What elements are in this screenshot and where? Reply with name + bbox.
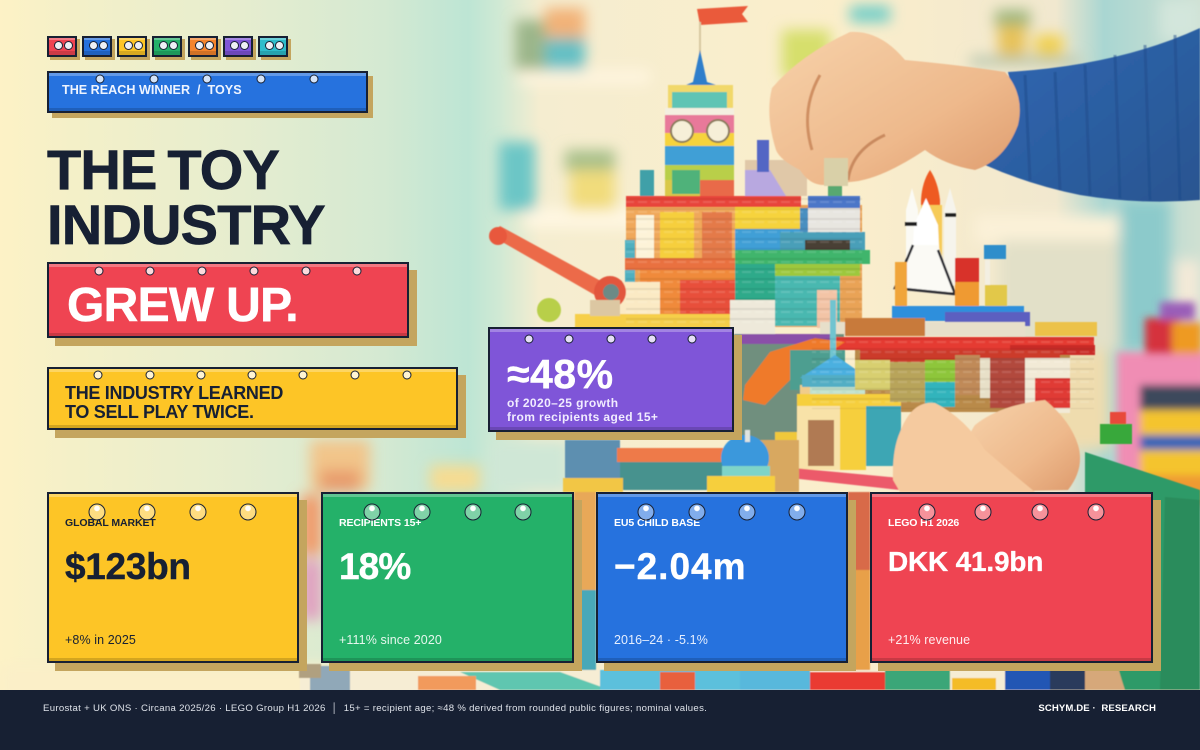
title: INDUSTRY (47, 193, 325, 256)
callout: 48 percent of growth: ≈48% (507, 351, 614, 397)
icon: blue brick (82, 36, 112, 57)
subhead banner: THE INDUSTRY LEARNED (65, 383, 283, 403)
colored brick row icons (47, 36, 291, 60)
stat card: EU5 child base: EU5 CHILD BASE (614, 517, 700, 529)
blurred pink toy shelf (1117, 302, 1200, 507)
footer brand: SCHYM.DE · RESEARCH (1038, 703, 1156, 714)
adult hand and blue sleeve (769, 28, 1200, 202)
callout: 48 percent of growth (488, 327, 734, 432)
stat card: EU5 child base: 2016–24 · -5.1% (614, 633, 708, 647)
toy crane (489, 226, 626, 322)
stat card: global market: $123bn (65, 546, 191, 587)
stat card: recipients 15+: +111% since 2020 (339, 633, 442, 647)
icon: teal brick (258, 36, 288, 57)
icon: purple brick (223, 36, 253, 57)
kicker label: THE REACH WINNER / TOYS (62, 83, 242, 97)
icon: red brick (47, 36, 77, 57)
brick platforms (563, 300, 1132, 675)
icon: yellow brick (117, 36, 147, 57)
title: THE TOY (47, 138, 279, 201)
stat card: global market: GLOBAL MARKET (65, 517, 156, 529)
stat card: LEGO H1 2026 (870, 492, 1153, 663)
headline banner: grew up (47, 262, 409, 338)
subhead banner (47, 367, 458, 430)
stat card: global market (47, 492, 299, 663)
title (47, 138, 326, 256)
icon: green brick (152, 36, 182, 57)
bottom strip of bricks (299, 664, 1200, 692)
subhead banner: TO SELL PLAY TWICE. (65, 402, 254, 422)
callout: 48 percent of growth: from recipients aged 15+ (507, 410, 658, 424)
footer source note: Eurostat + UK ONS · Circana 2025/26 · LEGO Group H1 2026 │ 15+ = recipient age; ≈48 % derived from rounded public figures; nominal values. (43, 703, 707, 714)
callout: 48 percent of growth: of 2020–25 growth (507, 396, 619, 410)
stat card: LEGO H1 2026: DKK 41.9bn (888, 546, 1043, 577)
stat card: recipients 15+: 18% (339, 546, 410, 587)
stat card: global market: +8% in 2025 (65, 633, 136, 647)
stat card: recipients 15+: RECIPIENTS 15+ (339, 517, 421, 529)
card studs (88, 504, 1104, 520)
kicker label (47, 71, 368, 113)
stat card: LEGO H1 2026: +21% revenue (888, 633, 970, 647)
space shuttle (895, 170, 1007, 310)
stat card: LEGO H1 2026: LEGO H1 2026 (888, 517, 959, 529)
footer band (0, 690, 1200, 750)
stat card: EU5 child base: −2.04m (614, 546, 747, 587)
stat card: EU5 child base (596, 492, 848, 663)
toy tower (575, 6, 870, 334)
stat card: recipients 15+ (321, 492, 574, 663)
icon: orange brick (188, 36, 218, 57)
child's hands and green sleeve (893, 400, 1200, 690)
headline banner: grew up: GREW UP. (67, 279, 298, 332)
